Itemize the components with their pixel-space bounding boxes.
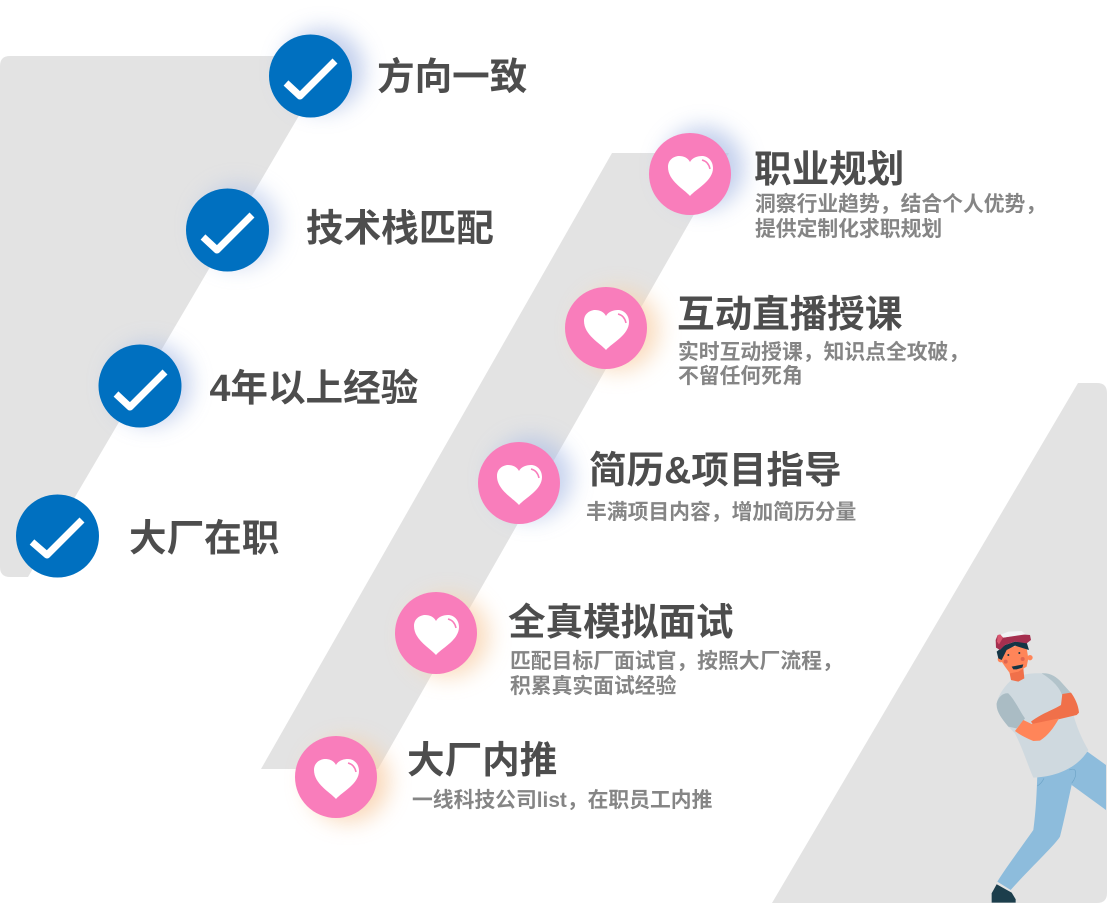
service: 全真模拟面试: 匹配目标厂面试官，按照大厂流程， <box>510 650 843 673</box>
service: 简历&项目指导: 丰满项目内容，增加简历分量 <box>586 500 856 524</box>
service: 职业规划 <box>649 127 1046 241</box>
service: 互动直播授课: 不留任何死角 <box>678 364 803 388</box>
service: 全真模拟面试: 积累真实面试经验 <box>510 674 677 698</box>
requirement: 大厂在职: 大厂在职 <box>129 517 279 559</box>
service: 大厂内推: 大厂内推 <box>407 739 557 781</box>
requirement: 技术栈匹配 <box>186 185 494 272</box>
service: 互动直播授课: 互动直播授课 <box>677 293 903 335</box>
requirement: 技术栈匹配: 技术栈匹配 <box>306 207 494 249</box>
requirement: 4年以上经验: 4年以上经验 <box>210 367 418 409</box>
service: 互动直播授课: 实时互动授课，知识点全攻破， <box>678 340 969 364</box>
requirement: 方向一致 <box>269 29 527 118</box>
service: 全真模拟面试: 全真模拟面试 <box>508 601 733 643</box>
requirement: 4年以上经验 <box>98 343 418 428</box>
service: 简历&项目指导 <box>478 437 856 524</box>
panel: middle grey stripe <box>261 153 729 769</box>
panel: left grey stripe <box>0 56 334 577</box>
illustration: man in cap with crossed arms <box>992 631 1106 903</box>
service: 职业规划: 提供定制化求职规划 <box>755 217 942 241</box>
service: 互动直播授课 <box>565 287 969 388</box>
requirement: 大厂在职 <box>16 494 279 578</box>
service: 简历&项目指导: 简历&项目指导 <box>589 449 842 491</box>
service: 大厂内推: 一线科技公司list，在职员工内推 <box>412 789 713 812</box>
requirement: 方向一致: 方向一致 <box>377 56 527 98</box>
service: 全真模拟面试 <box>395 592 843 698</box>
service: 大厂内推 <box>295 736 713 822</box>
service: 职业规划: 职业规划 <box>754 148 904 190</box>
service: 职业规划: 洞察行业趋势，结合个人优势， <box>755 193 1046 216</box>
panel: right grey stripe <box>772 383 1107 903</box>
